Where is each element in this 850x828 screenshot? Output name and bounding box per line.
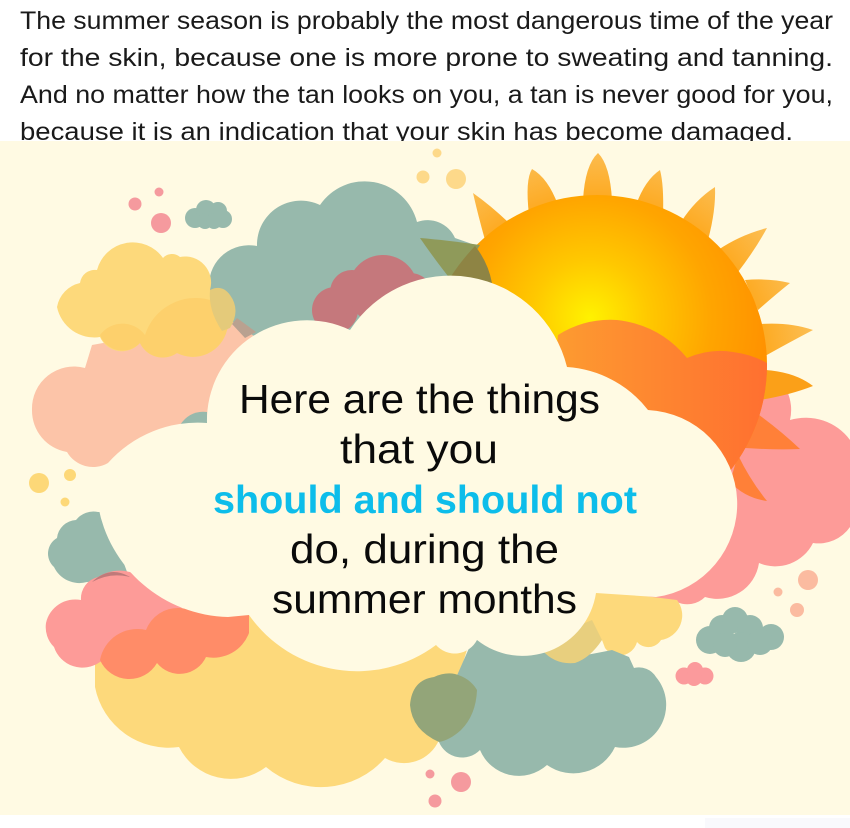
cloud: left teal: [48, 512, 130, 583]
main centre cloud: [98, 276, 737, 671]
cloud: top left yellow: [57, 242, 236, 358]
cloud: small pink right: [676, 662, 714, 686]
cloud overlap on sun: [557, 320, 767, 470]
overlap on peach: [100, 298, 232, 358]
headline text: Here are the things: [239, 376, 600, 422]
cloud: small teal right: [696, 607, 784, 662]
cloud: small teal top left: [185, 200, 232, 229]
cloud: top teal: [209, 181, 490, 345]
overlap of right yellow on teal: [542, 620, 602, 663]
sun rays: [473, 153, 813, 501]
cloud: dark pink on teal: [312, 255, 434, 333]
headline text: [213, 376, 637, 622]
peach and teal overlap: [232, 318, 256, 338]
dots: yellow left: [29, 469, 76, 506]
cloud: lower left pink: [46, 571, 249, 679]
cloud: bottom teal: [410, 620, 666, 776]
headline text: do, during the: [290, 526, 559, 572]
cloud: right pink: [640, 370, 850, 604]
overlap on left teal: [92, 572, 130, 582]
cloud: big yellow bottom: [95, 600, 470, 787]
dots: pink bottom: [426, 770, 471, 808]
headline text: that you: [340, 426, 498, 472]
overlap on yellow: [100, 608, 249, 679]
headline text: should and should not: [213, 479, 637, 522]
sun disc: [427, 195, 767, 535]
teal bit behind centre cloud: [180, 412, 207, 428]
cloud: lower right yellow: [560, 590, 682, 655]
intro paragraph: [20, 7, 833, 146]
dots: pink top left: [128, 188, 171, 233]
intro paragraph: The summer season is probably the most dangerous time of the year: [20, 7, 833, 35]
sun edge over teal cloud: [450, 246, 492, 283]
intro paragraph: And no matter how the tan looks on you, a tan is never good for you,: [20, 81, 833, 109]
intro paragraph: for the skin, because one is more prone to sweating and tanning.: [20, 44, 833, 72]
cloud: left peach: [32, 320, 260, 467]
overlap on teal: [210, 288, 236, 331]
sun ray over teal cloud: [420, 238, 480, 285]
dots: peach right: [774, 570, 818, 617]
headline text: summer months: [272, 576, 577, 622]
dots: yellow top: [416, 148, 466, 189]
intro paragraph: because it is an indication that your skin has become damaged.: [20, 118, 793, 146]
overlap on yellow: [410, 673, 477, 742]
